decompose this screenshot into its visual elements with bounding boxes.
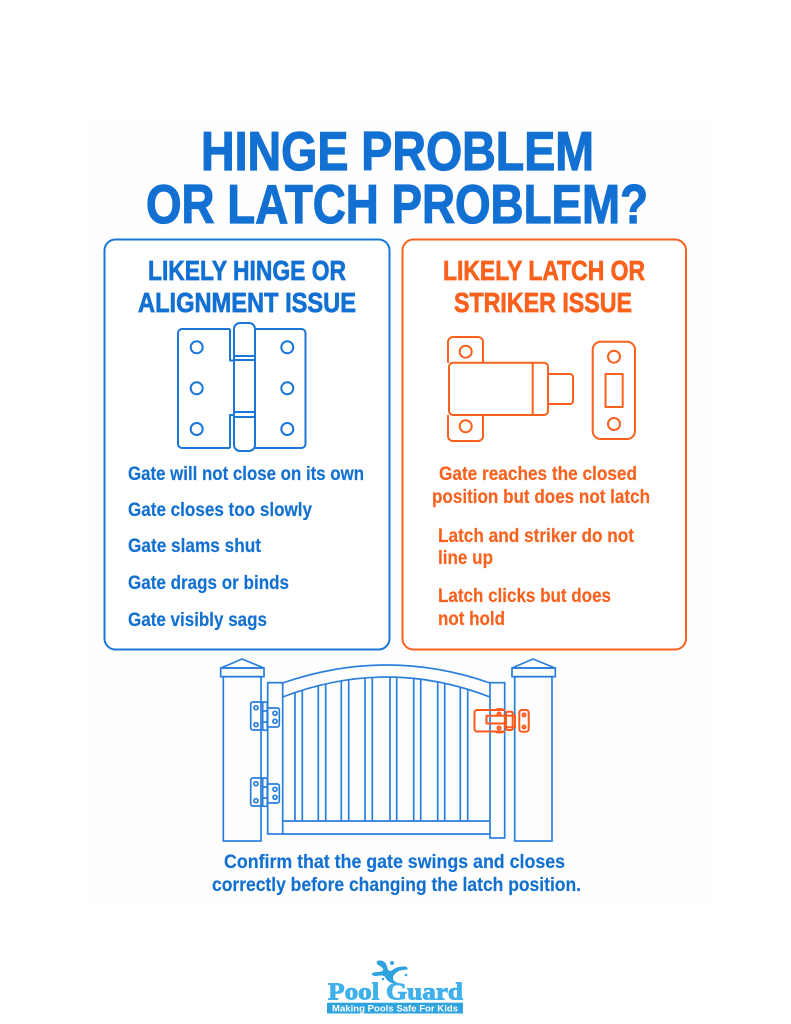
list: hinge symptoms: Gate will not close on its own	[128, 464, 364, 485]
orange gate latch	[474, 709, 529, 733]
upper hinge	[251, 702, 279, 730]
wordmark: Pool Guard	[328, 980, 464, 1006]
list: hinge symptoms	[128, 464, 364, 631]
title: HINGE PROBLEM	[201, 120, 594, 182]
icon: door hinge	[178, 323, 306, 451]
panel: likely latch or striker issue	[402, 240, 686, 650]
tagline bar: Making Pools Safe For Kids	[332, 1004, 458, 1014]
logo: Pool Guard	[327, 960, 464, 1014]
right post	[512, 659, 555, 841]
left post	[221, 659, 264, 841]
heading: hinge issue: LIKELY HINGE OR	[148, 255, 346, 286]
list: hinge symptoms: Gate drags or binds	[128, 573, 289, 594]
illustration: gate with hinges and latch	[221, 659, 555, 841]
icon: latch and striker	[448, 337, 635, 441]
title: OR LATCH PROBLEM?	[146, 173, 648, 235]
list: latch symptoms: line up	[438, 548, 493, 569]
caption: Confirm that the gate swings and closes	[224, 852, 565, 873]
list: latch symptoms	[432, 464, 650, 630]
heading: latch issue: LIKELY LATCH OR	[443, 255, 645, 286]
list: hinge symptoms: Gate slams shut	[128, 536, 262, 557]
list: latch symptoms: position but does not latch	[432, 487, 650, 508]
gate frame	[268, 665, 505, 838]
list: hinge symptoms: Gate visibly sags	[128, 610, 267, 631]
heading: latch issue: STRIKER ISSUE	[454, 287, 632, 318]
gate pickets	[295, 677, 468, 821]
list: latch symptoms: Latch clicks but does	[438, 586, 611, 607]
heading: latch issue	[443, 255, 645, 318]
caption: correctly before changing the latch position.	[212, 875, 581, 896]
heading: hinge issue: ALIGNMENT ISSUE	[138, 287, 356, 318]
list: latch symptoms: not hold	[438, 609, 505, 630]
panel: likely hinge or alignment issue	[104, 240, 390, 650]
lower hinge	[251, 778, 279, 806]
list: latch symptoms: Gate reaches the closed	[439, 464, 637, 485]
list: hinge symptoms: Gate closes too slowly	[128, 500, 312, 521]
heading: hinge issue	[138, 255, 356, 318]
list: latch symptoms: Latch and striker do not	[438, 526, 635, 547]
icon: water splash	[372, 960, 408, 984]
title	[146, 120, 648, 235]
caption	[212, 852, 581, 896]
